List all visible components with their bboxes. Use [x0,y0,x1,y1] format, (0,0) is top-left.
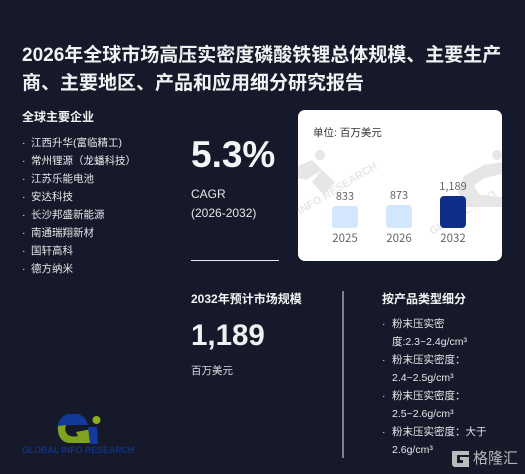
CAGR label [191,187,256,220]
panel: product type segments [382,292,486,456]
company list: · [22,245,26,257]
Gelonghui text: 格隆汇 [473,450,518,467]
company list [22,137,136,275]
product type list: 度:2.3~2.4g/cm³ [392,336,467,348]
product type list: 粉末压实密度：大于 [392,426,486,438]
bar 2032 [439,178,467,246]
company list: · [22,209,26,221]
company list: · [22,155,26,167]
watermark: GLOBAL INFO [427,188,499,238]
product type list: 2.6g/cm³ [392,444,433,456]
company list: · [22,263,26,275]
company list: · [22,227,26,239]
heading: companies: 全球主要企业 [22,110,94,124]
watermark: Gelonghui [452,450,518,467]
bar 2032: 2032 [440,230,466,246]
company list: 南通瑞翔新材 [31,227,94,239]
bar 2026 [386,187,412,246]
company list: 国轩高科 [31,245,73,257]
bar 2026: 873 [390,187,408,203]
G icon [452,451,469,467]
company list: · [22,191,26,203]
product type list: 粉末压实密度： [392,390,466,402]
company list: · [22,173,26,185]
bar 2032: 1,189 [439,178,467,194]
bar 2026: 2026 [386,230,412,246]
title: 商、主要地区、产品和应用细分研究报告 [22,73,364,94]
title [22,44,501,94]
heading: product type: 按产品类型细分 [382,292,466,306]
company list: · [22,137,26,149]
product type list: · [382,390,386,402]
company list: 德方纳米 [31,263,73,275]
product type list: 粉末压实密度： [392,354,466,366]
CAGR value: 5.3% [191,134,275,175]
heading: market size: 2032年预计市场规模 [191,292,302,306]
bar 2025: 833 [336,188,354,204]
bar 2025 [332,188,358,246]
company list: 江西升华(富临精工) [31,137,122,149]
logo icon [58,414,100,444]
company list: 常州锂源（龙蟠科技） [31,155,136,167]
company list: 江苏乐能电池 [31,173,94,185]
CAGR label: CAGR [191,187,226,201]
product type list: 粉末压实密 [392,318,444,330]
panel: bar chart card [298,110,502,261]
unit label: 单位: 百万美元 [313,127,382,139]
product type list [382,318,486,456]
logo: Global Info Research [22,414,134,455]
logo text: GLOBAL INFO RESEARCH [22,445,134,455]
watermark [298,150,502,238]
company list: 长沙邦盛新能源 [31,209,104,221]
market size unit: 百万美元 [191,365,233,377]
company list: 安达科技 [31,191,73,203]
panel: global key companies [22,110,136,275]
product type list: · [382,426,386,438]
product type list: 2.4~2.5g/cm³ [392,372,454,384]
CAGR label: (2026-2032) [191,206,256,220]
product type list: · [382,318,386,330]
bar 2025: 2025 [332,230,358,246]
product type list: 2.5~2.6g/cm³ [392,408,454,420]
product type list: · [382,354,386,366]
panel: 2032 market size [191,292,302,377]
title: 2026年全球市场高压实密度磷酸铁锂总体规模、主要生产 [22,45,501,66]
market size value: 1,189 [191,319,265,352]
